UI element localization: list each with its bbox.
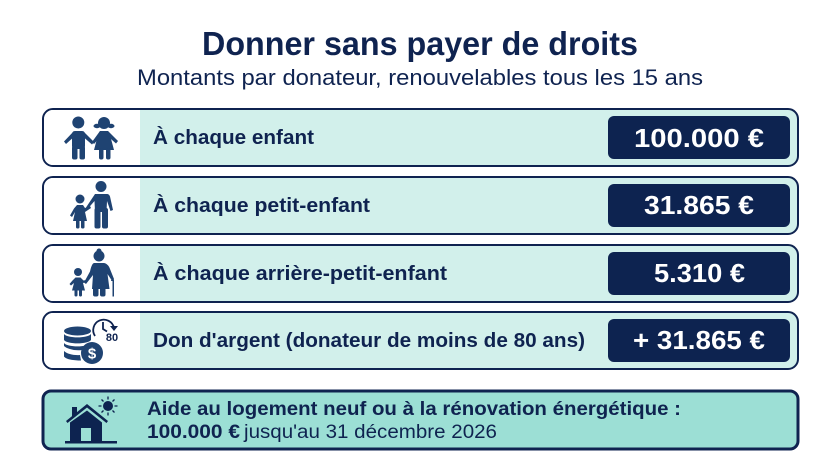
value box [608, 319, 790, 362]
value box [608, 116, 790, 159]
label: À chaque petit-enfant [153, 194, 370, 217]
panel: chaque petit-enfant [43, 177, 798, 234]
callout text: 100.000 € [147, 422, 240, 443]
value box [608, 184, 790, 227]
icon: grandmother and child [70, 248, 114, 296]
value: 31.865 € [644, 190, 754, 220]
subtitle: Montants par donateur, renouvelables tous les 15 ans [137, 65, 703, 90]
panel: chaque arriere-petit-enfant [43, 245, 798, 302]
icon: house and sun [65, 396, 118, 444]
icon: coins and clock [64, 320, 118, 364]
icon: two children [64, 116, 118, 160]
panel: don d'argent [43, 312, 798, 369]
icon: coins and clock: 80 [106, 332, 118, 344]
panel: chaque enfant [43, 109, 798, 166]
label: À chaque arrière-petit-enfant [153, 262, 447, 285]
label: À chaque enfant [153, 126, 314, 149]
title: Donner sans payer de droits [202, 25, 638, 62]
callout text: Aide au logement neuf ou à la rénovation énergétique : [147, 399, 681, 420]
panel: aide au logement [43, 391, 798, 449]
callout text: jusqu'au 31 décembre 2026 [243, 422, 497, 443]
value box [608, 252, 790, 295]
value: + 31.865 € [633, 325, 765, 355]
label: Don d'argent (donateur de moins de 80 ans) [153, 330, 585, 352]
icon: adult and child [70, 181, 113, 228]
value: 5.310 € [654, 258, 745, 288]
callout text [147, 399, 681, 443]
icon: coins and clock: $ [88, 346, 97, 362]
value: 100.000 € [634, 123, 764, 153]
